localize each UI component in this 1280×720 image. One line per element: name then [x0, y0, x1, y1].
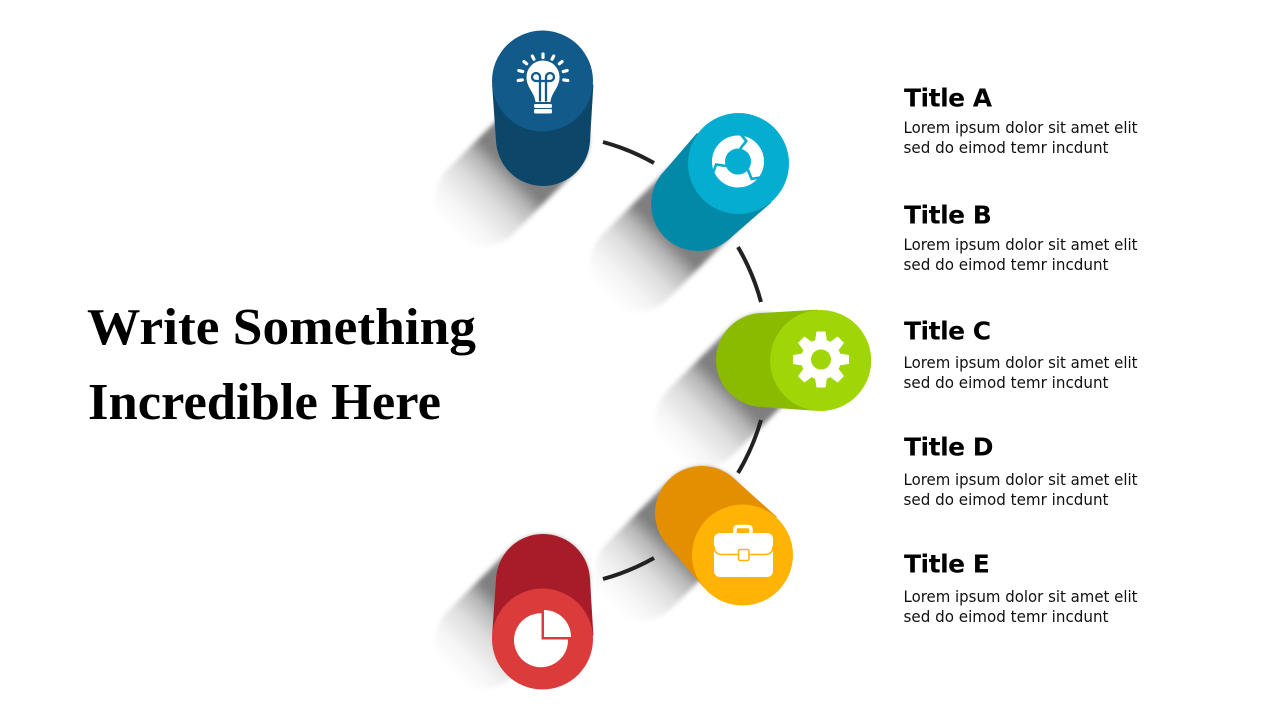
text block: Title E	[904, 550, 1138, 626]
text block: Title D	[904, 432, 1138, 509]
icon: pie chart	[514, 610, 571, 667]
text block: Title D: Lorem ipsum dolor sit amet elit	[904, 470, 1138, 489]
text block: Title C: Lorem ipsum dolor sit amet elit	[904, 353, 1138, 372]
text block: Title A: Lorem ipsum dolor sit amet elit	[904, 118, 1138, 137]
text block: Title E: Title E	[904, 550, 989, 578]
cast shadows	[481, 139, 763, 643]
cylinder D	[655, 466, 793, 606]
text block: Title A: sed do eimod temr incdunt	[904, 138, 1108, 157]
text block: Title A	[904, 84, 1138, 157]
text block: Title E: Lorem ipsum dolor sit amet elit	[904, 587, 1138, 606]
connecting arcs	[603, 142, 761, 579]
text block: Title D: Title D	[904, 432, 993, 462]
text block: Title C: sed do eimod temr incdunt	[904, 373, 1108, 392]
cylinder B	[651, 113, 789, 251]
icon: cycle arrows	[711, 135, 760, 182]
text block: Title E: sed do eimod temr incdunt	[904, 607, 1108, 626]
text block: Title C	[904, 316, 1138, 392]
icon: gear	[793, 332, 849, 388]
icon: briefcase	[714, 526, 773, 577]
title: Write Something	[87, 299, 476, 356]
text block: Title A: Title A	[904, 84, 993, 112]
cylinder E	[492, 534, 593, 690]
title: Incredible Here	[88, 374, 441, 431]
icon: light bulb	[518, 54, 568, 114]
text block: Title B: sed do eimod temr incdunt	[904, 255, 1108, 274]
text block: Title B	[904, 200, 1138, 274]
title	[87, 299, 476, 431]
text block: Title D: sed do eimod temr incdunt	[904, 490, 1108, 509]
text block: Title C: Title C	[904, 316, 991, 346]
text block: Title B: Title B	[904, 200, 991, 230]
cylinder C	[716, 310, 871, 411]
text block: Title B: Lorem ipsum dolor sit amet elit	[904, 235, 1138, 254]
cylinder A	[492, 30, 593, 186]
